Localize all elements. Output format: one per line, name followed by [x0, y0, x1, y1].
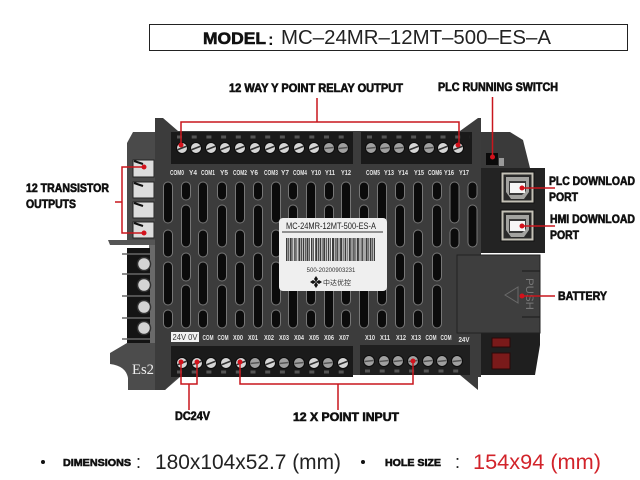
bottom terminal labels: 24V	[458, 337, 470, 344]
top terminal labels	[170, 170, 469, 177]
callout: HMI download port	[520, 214, 635, 242]
callout: battery	[520, 291, 607, 303]
callout: 12 X point input	[238, 358, 416, 424]
top terminal labels: COM1	[201, 170, 215, 177]
top terminal labels: COM2	[233, 170, 247, 177]
logo	[310, 276, 322, 288]
transistor output connectors	[133, 160, 154, 238]
bottom terminal labels	[202, 335, 470, 344]
battery cover: PUSH	[523, 278, 535, 310]
top terminal labels: Y12	[341, 170, 351, 177]
title: model label: MODEL	[203, 29, 266, 48]
bottom terminal labels: X06	[324, 335, 334, 342]
main body	[155, 118, 481, 390]
specification: dimensions: 180x104x52.7 (mm)	[155, 451, 341, 474]
callout: 12 way Y point relay output: 12 WAY Y POINT RELAY OUTPUT	[229, 83, 403, 95]
top terminal labels: COM6	[428, 170, 442, 177]
bottom terminal labels: COM	[202, 335, 214, 342]
barcode	[286, 238, 375, 261]
title: colon: :	[268, 30, 274, 49]
bottom terminal labels: X13	[411, 335, 421, 342]
top terminal labels: COM5	[366, 170, 380, 177]
callout: battery: BATTERY	[558, 291, 607, 303]
USB port: PLC download	[501, 172, 534, 203]
product sticker: MC-24MR-12MT-500-ES-A	[286, 221, 376, 231]
specification: hole size: HOLE SIZE	[385, 457, 441, 469]
top terminal labels: COM3	[264, 170, 278, 177]
bottom terminal labels: X03	[279, 335, 289, 342]
callout: DC24V	[175, 360, 210, 423]
power terminal strip	[122, 245, 155, 345]
callout: HMI download port: PORT	[550, 230, 579, 242]
product sticker: 中达优控	[323, 278, 351, 287]
bottom terminal labels: X00	[233, 335, 243, 342]
bottom terminal labels: X12	[396, 335, 406, 342]
bottom terminal labels: X02	[264, 335, 274, 342]
specification: dimensions: DIMENSIONS	[63, 457, 131, 469]
USB port: HMI download	[501, 210, 534, 241]
product sticker	[279, 218, 387, 291]
top terminal labels: Y17	[459, 170, 469, 177]
top terminal labels: Y5	[220, 170, 228, 177]
mounting shelf	[108, 240, 156, 245]
callout: PLC running switch	[438, 82, 558, 160]
top terminal labels: Y15	[414, 170, 424, 177]
lower left foot plate	[110, 343, 180, 390]
top terminal labels: Y16	[444, 170, 454, 177]
callout: 12 transistor outputs: OUTPUTS	[26, 199, 76, 211]
24V 0V tag: 24V 0V	[172, 333, 198, 342]
bottom terminal labels: X05	[309, 335, 319, 342]
top terminal labels: Y11	[325, 170, 335, 177]
top terminal blocks	[171, 132, 472, 164]
bottom terminal labels: COM	[426, 335, 437, 342]
title: model number: MC–24MR–12MT–500–ES–A	[281, 27, 552, 49]
bottom terminal blocks	[171, 345, 470, 377]
top terminal labels: Y14	[398, 170, 408, 177]
callout: PLC download port	[520, 176, 635, 204]
bottom terminal labels: X04	[294, 335, 304, 342]
specification: hole size: :	[455, 452, 460, 472]
PLC device photo	[108, 118, 545, 390]
callout: 12 transistor outputs: 12 TRANSISTOR	[26, 183, 110, 195]
top terminal labels: Y7	[281, 170, 289, 177]
top terminal labels: COM0	[170, 170, 184, 177]
callout: PLC download port: PORT	[549, 192, 578, 204]
specification: hole size	[361, 451, 601, 474]
bottom terminal labels: X11	[380, 335, 390, 342]
callout: 12 X point input: 12 X POINT INPUT	[293, 412, 399, 424]
callout: 12 transistor outputs	[26, 164, 146, 236]
callout: PLC running switch: PLC RUNNING SWITCH	[438, 82, 558, 94]
ventilation slots	[164, 182, 477, 328]
callout: 12 way Y point relay output	[178, 83, 460, 148]
specification: dimensions: :	[136, 452, 141, 472]
bottom terminal labels: X01	[248, 335, 258, 342]
top terminal labels: Y10	[311, 170, 321, 177]
top terminal labels: Y6	[250, 170, 258, 177]
PLC running switch	[486, 153, 504, 166]
foot plate mark: Es2	[132, 362, 154, 378]
specification: hole size: 154x94 (mm)	[473, 451, 601, 474]
bottom terminal labels: X07	[339, 335, 349, 342]
specification: dimensions	[41, 451, 341, 474]
title box	[150, 24, 628, 50]
top terminal labels: COM4	[293, 170, 307, 177]
top terminal labels: Y4	[189, 170, 197, 177]
red terminal connectors	[492, 338, 510, 369]
battery cover	[457, 255, 540, 333]
left module housing	[127, 132, 155, 240]
product sticker: 500-20200903231	[307, 268, 356, 274]
bottom terminal labels: COM	[440, 335, 452, 342]
top terminal labels: Y13	[384, 170, 394, 177]
bottom terminal labels: COM	[218, 335, 229, 342]
bottom terminal labels: X10	[365, 335, 375, 342]
right port housing	[481, 132, 545, 375]
callout: DC24V: DC24V	[175, 411, 210, 423]
